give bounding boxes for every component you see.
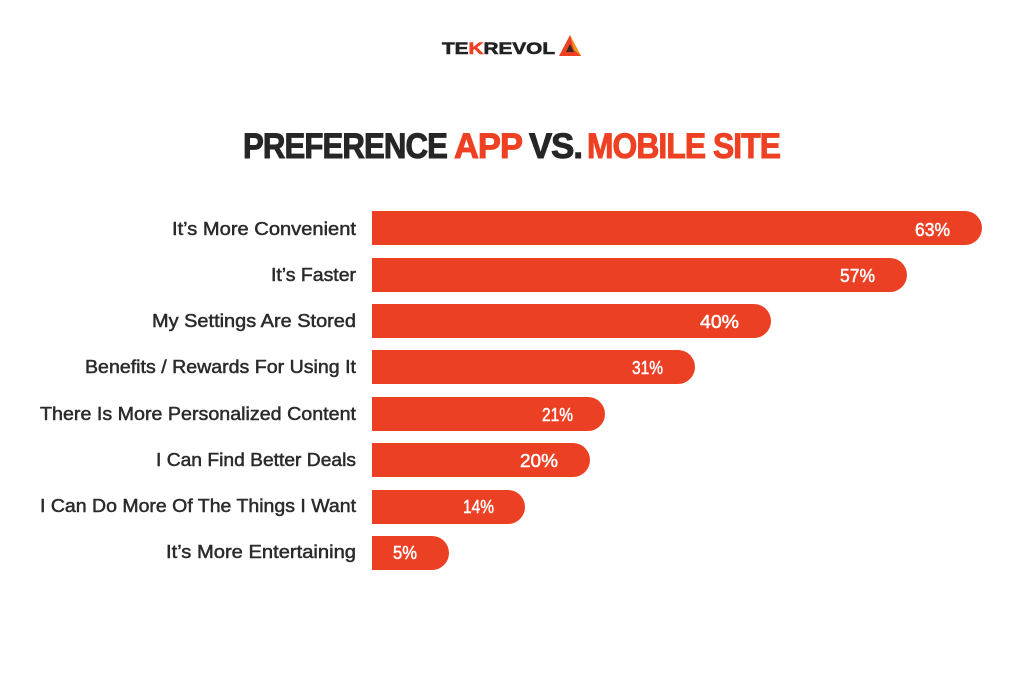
row: Benefits / Rewards For Using It 31% [85,350,695,384]
title: VS. [529,127,582,166]
row: There Is More Personalized Content 21% [40,397,605,431]
row: I Can Find Better Deals 20% [156,443,590,477]
row: It's Faster 57%: 57% [840,265,875,286]
row: I Can Do More Of The Things I Want 14%: I Can Do More Of The Things I Want [40,495,356,516]
row: It's Faster 57%: It’s Faster [271,264,356,285]
row: It's More Convenient 63%: 63% [915,219,950,240]
title: MOBILE SITE [587,127,780,166]
row: It's More Convenient 63% [172,211,982,245]
logo wordmark: TE KREVOL [442,40,555,58]
bar chart [40,211,982,570]
row: I Can Find Better Deals 20%: 20% [520,450,558,471]
row: I Can Do More Of The Things I Want 14% [40,490,525,524]
title [243,127,780,166]
row: It's Faster 57% [271,258,907,292]
logo [442,35,581,58]
row: It's More Entertaining 5% [166,536,449,570]
row: There Is More Personalized Content 21%: There Is More Personalized Content [40,403,356,424]
row: I Can Find Better Deals 20%: I Can Find Better Deals [156,449,356,470]
icon: logo triangle [559,35,581,56]
row: There Is More Personalized Content 21%: 21% [542,404,573,425]
row: My Settings Are Stored 40% [152,304,771,338]
title: APP [454,127,523,166]
title: PREFERENCE [243,127,447,166]
row: I Can Do More Of The Things I Want 14%: 14% [463,496,494,517]
row: My Settings Are Stored 40%: 40% [700,311,739,332]
row: It's More Convenient 63%: It’s More Convenient [172,218,356,239]
row: It's More Entertaining 5%: It’s More Entertaining [166,541,356,562]
row: Benefits / Rewards For Using It 31%: Benefits / Rewards For Using It [85,356,356,377]
row: My Settings Are Stored 40%: My Settings Are Stored [152,310,356,331]
row: It's More Entertaining 5%: 5% [393,542,417,563]
row: Benefits / Rewards For Using It 31%: 31% [632,357,663,378]
